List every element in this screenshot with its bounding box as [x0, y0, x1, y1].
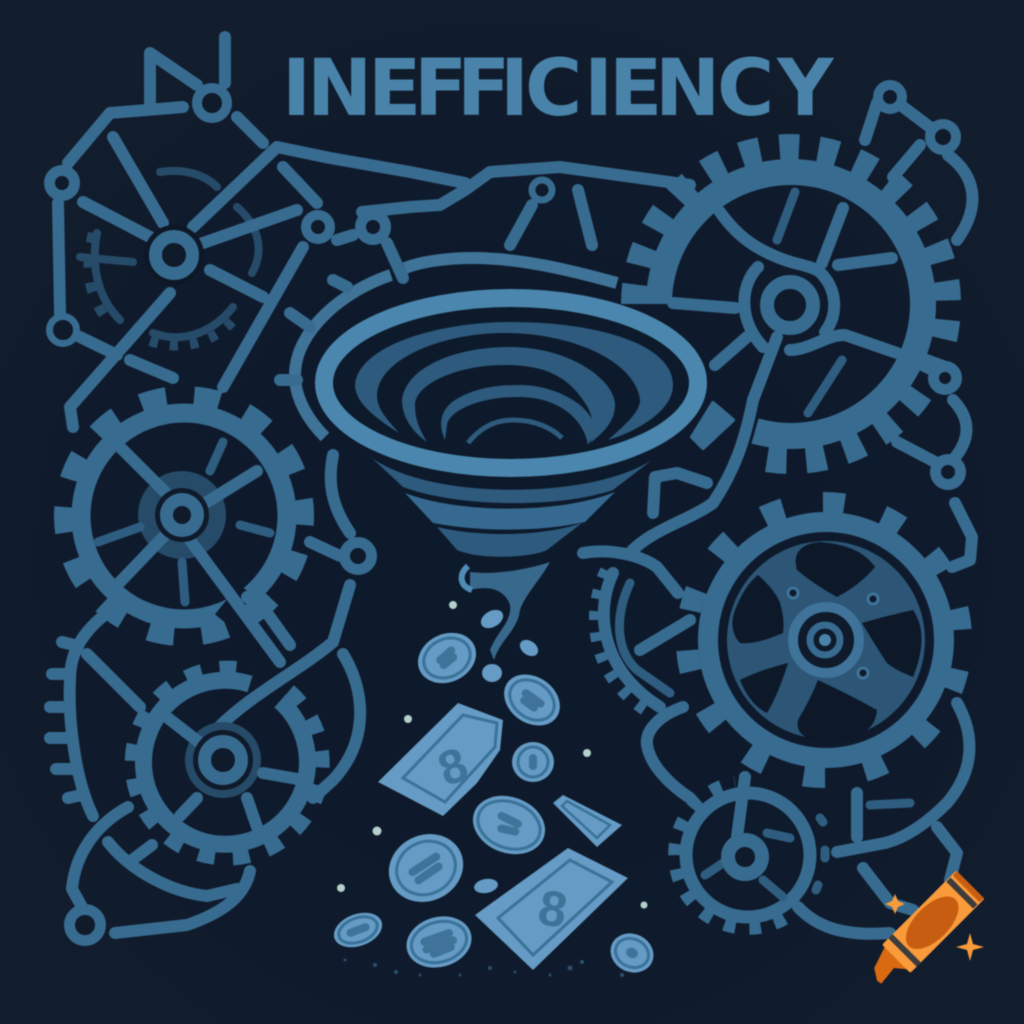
gear: dim top left — [80, 171, 259, 346]
bill left — [378, 703, 503, 816]
coins and bills — [329, 601, 660, 980]
linkage: left centre curves — [217, 455, 360, 798]
crayon logo — [861, 870, 985, 994]
inner rings — [355, 322, 673, 440]
coin — [401, 909, 477, 975]
coin — [378, 822, 474, 914]
gear: large top right — [634, 147, 948, 461]
sparkle — [885, 894, 905, 914]
gear: bottom left — [132, 668, 322, 858]
linkage nodes — [50, 88, 552, 940]
funnel — [280, 258, 698, 557]
linkage: bottom left curves — [72, 807, 250, 933]
gear: far left teeth arc — [50, 613, 140, 816]
bill small — [553, 795, 622, 847]
dust at bottom — [344, 958, 624, 977]
funnel spout drip — [462, 562, 550, 660]
linkage: hub top left — [144, 225, 204, 285]
title: INEFFICIENCY — [282, 44, 835, 134]
funnel stripes — [372, 458, 652, 503]
gear: large right with spokes — [661, 477, 987, 803]
linkage: right cables — [583, 337, 969, 852]
gear: left middle — [48, 380, 320, 662]
linkage: top left arms — [58, 37, 465, 427]
coin — [604, 926, 660, 980]
coin — [494, 664, 570, 736]
linkage: top centre cable — [362, 167, 690, 278]
crumbs — [337, 601, 648, 908]
coin — [329, 906, 387, 954]
bill bottom: 8 — [534, 879, 571, 939]
linkage: top right arms — [865, 85, 972, 567]
gear: mid right behind — [595, 570, 690, 716]
funnel bowl — [324, 298, 698, 468]
linkage: bottom right curves — [798, 793, 957, 934]
gear: bottom right small — [674, 777, 825, 929]
coin — [512, 742, 554, 782]
droplets — [473, 606, 541, 895]
coin — [410, 624, 484, 692]
sparkle — [956, 933, 984, 961]
coin — [465, 786, 553, 864]
arc teeth — [280, 280, 347, 380]
bill left: 8 — [432, 738, 475, 797]
outer arc above funnel — [295, 258, 617, 437]
bill bottom — [475, 848, 628, 970]
